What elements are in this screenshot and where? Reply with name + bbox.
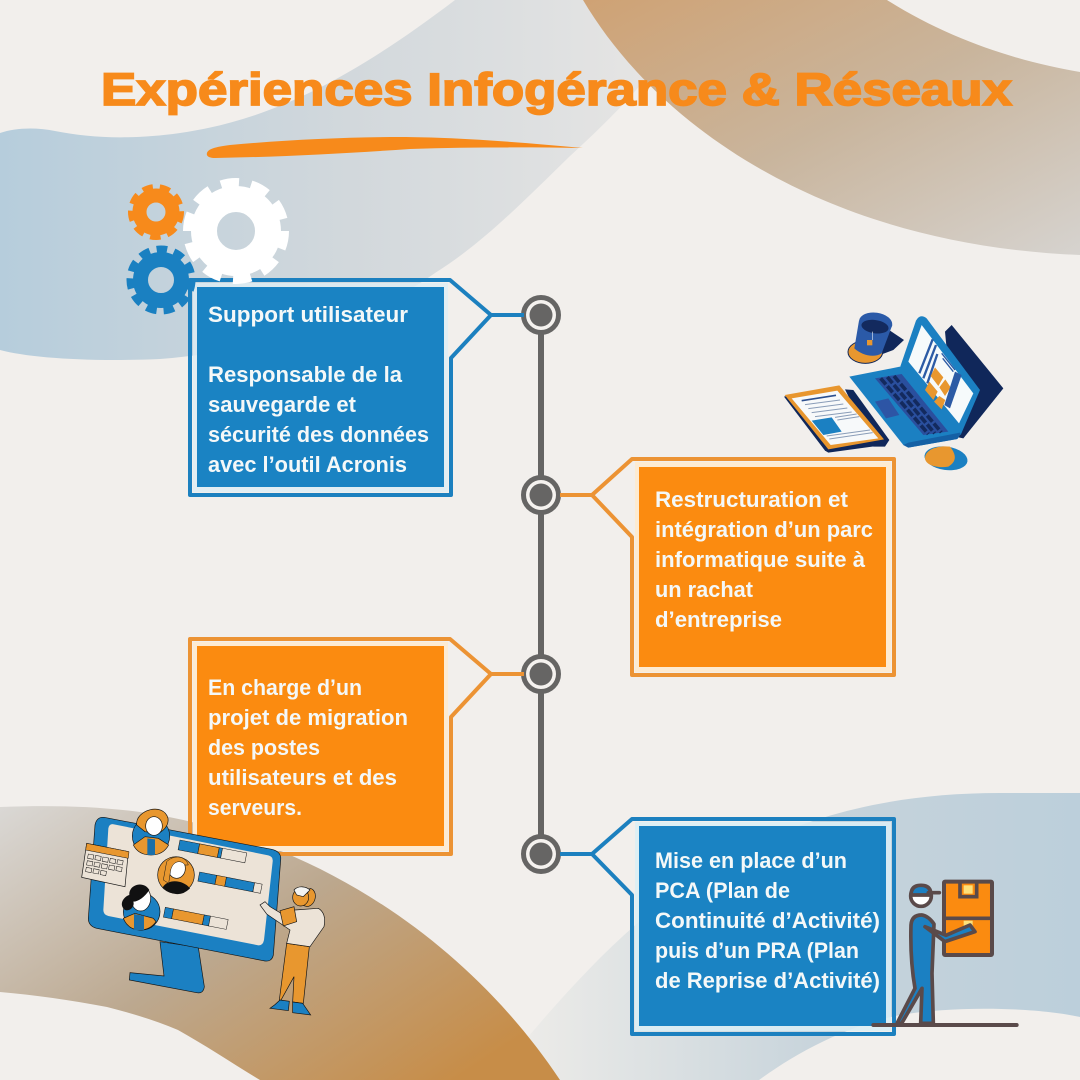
icon: monitor — [88, 817, 281, 961]
panel: PCA PRA — [560, 819, 894, 1034]
text: support utilisateur: avec l’outil Acronis — [208, 452, 407, 477]
text: restructuration: d’entreprise — [655, 607, 782, 632]
text: support utilisateur: sauvegarde et — [208, 392, 357, 417]
icon: laptop — [849, 316, 1003, 448]
panel: support utilisateur — [190, 280, 524, 495]
chart: progress bar 3 — [163, 907, 228, 929]
icon: monitor stand — [129, 942, 204, 993]
background shape: bottom right blue-grey wave — [528, 793, 1080, 1080]
panel: migration — [190, 639, 524, 854]
icon: orange gear — [131, 187, 181, 237]
text: restructuration — [655, 487, 873, 632]
timeline node 2 — [524, 478, 558, 512]
timeline node 3 — [524, 656, 558, 692]
chart: progress bar 1 — [178, 840, 247, 863]
icon: man with tablet — [260, 887, 325, 1015]
timeline node 4 — [524, 836, 558, 872]
text: PCA PRA: Continuité d’Activité) — [655, 908, 880, 933]
icon: person avatar 2 — [158, 857, 194, 894]
text: support utilisateur — [208, 302, 429, 477]
icon: mouse — [923, 444, 969, 473]
illustration: monitor with team — [82, 809, 325, 1015]
panel: restructuration — [560, 459, 894, 675]
text: support utilisateur: sécurité des données — [208, 422, 429, 447]
icon: person avatar 3 — [122, 885, 160, 930]
timeline node 1 — [524, 298, 558, 332]
icon: white gear — [188, 183, 284, 279]
icon: tablet — [784, 385, 889, 453]
background shape: bottom left brown wave — [0, 806, 560, 1080]
background shape: top left blue-grey wave — [0, 0, 700, 360]
title underline brush stroke — [207, 137, 583, 158]
icon: calendar — [82, 843, 129, 887]
text: migration — [208, 675, 408, 820]
icon: cup — [848, 310, 904, 363]
text: restructuration: intégration d’un parc — [655, 517, 873, 542]
text: migration: projet de migration — [208, 705, 408, 730]
text: restructuration: informatique suite à — [655, 547, 866, 572]
text: migration: utilisateurs et des — [208, 765, 397, 790]
text: migration: des postes — [208, 735, 320, 760]
background shape: top right tan band — [583, 0, 1080, 255]
text: PCA PRA: PCA (Plan de — [655, 878, 790, 903]
text: restructuration: Restructuration et — [655, 487, 849, 512]
text: migration: serveurs. — [208, 795, 302, 820]
text: PCA PRA: Mise en place d’un — [655, 848, 847, 873]
text: PCA PRA — [655, 848, 880, 993]
icon: blue gear — [130, 249, 192, 311]
timeline — [524, 298, 558, 872]
chart: progress bar 2 — [198, 872, 262, 893]
text: PCA PRA: de Reprise d’Activité) — [655, 968, 880, 993]
icon: ground line — [873, 1019, 1017, 1031]
text: restructuration: un rachat — [655, 577, 754, 602]
illustration: delivery man — [873, 882, 1017, 1025]
icon: boxes — [944, 882, 992, 955]
title: Expériences Infogérance & Réseaux — [101, 64, 1012, 115]
text: PCA PRA: puis d’un PRA (Plan — [655, 938, 859, 963]
timeline vertical line — [538, 315, 544, 854]
icon: person avatar 1 — [132, 809, 170, 855]
text: migration: En charge d’un — [208, 675, 362, 700]
text: support utilisateur: Responsable de la — [208, 362, 403, 387]
text: support utilisateur: Support utilisateur — [208, 302, 408, 327]
icon: man — [897, 885, 975, 1023]
illustration: laptop tablet cup mouse — [784, 310, 1003, 473]
icon: gears — [130, 183, 284, 311]
